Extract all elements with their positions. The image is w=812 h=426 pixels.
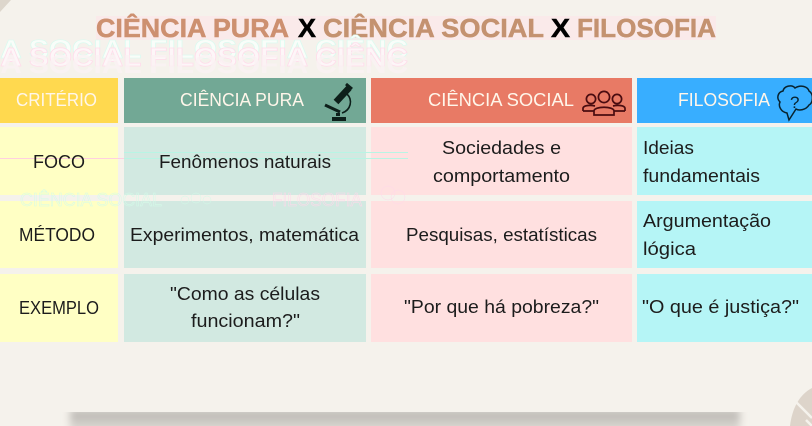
ghost header artifact: [20, 186, 405, 210]
header: ciência social: [371, 78, 632, 123]
row: foco: fundamentais: [643, 166, 760, 186]
title: X: [298, 13, 317, 43]
row: foco: [0, 127, 812, 195]
ghost title artifact: IA SOCIAL FILOSOFIA CIÊNC: [0, 49, 408, 79]
row: foco: Ideias: [643, 138, 694, 158]
ghost title artifact: IA SOCIAL FILOSOFIA CIÊNC: [0, 42, 408, 72]
header: ciência social: CIÊNCIA SOCIAL: [428, 90, 574, 110]
header: ciência pura: CIÊNCIA PURA: [180, 90, 304, 110]
title: [96, 13, 716, 43]
row: foco: FOCO: [33, 152, 85, 172]
row: exemplo: [0, 274, 812, 342]
row: método: Experimentos, matemática: [130, 225, 360, 245]
row: foco: Fenômenos naturais: [159, 152, 331, 172]
icon: group of people: [583, 91, 625, 115]
title: X: [551, 13, 571, 43]
header: ciência pura: [124, 78, 366, 123]
title: CIÊNCIA PURA: [96, 13, 289, 43]
title: CIÊNCIA SOCIAL: [323, 13, 544, 43]
ghost title artifact: [0, 34, 408, 79]
ghost header artifact: CIÊNCIA SOCIAL: [20, 190, 162, 210]
row: método: Pesquisas, estatísticas: [406, 225, 597, 245]
icon: microscope: [325, 84, 352, 119]
row: exemplo: "O que é justiça?": [642, 297, 799, 317]
header: critério: [0, 78, 118, 123]
header: critério: CRITÉRIO: [16, 90, 97, 110]
row: exemplo: funcionam?": [191, 311, 300, 331]
row: foco: Sociedades e: [442, 138, 561, 158]
bottom shadow: [40, 395, 780, 426]
row: exemplo: "Como as células: [170, 284, 320, 304]
ghost header artifact: FILOSOFIA: [272, 190, 362, 210]
row: exemplo: EXEMPLO: [19, 298, 99, 318]
title: FILOSOFIA: [577, 13, 716, 43]
row: método: lógica: [643, 239, 697, 259]
ghost title artifact: IA SOCIAL FILOSOFIA CIÊNC: [0, 34, 408, 64]
header: filosofia: [637, 78, 812, 123]
row: método: Argumentação: [643, 211, 771, 231]
icon: thought bubble with question mark: ?: [790, 93, 799, 112]
row: exemplo: "Por que há pobreza?": [404, 297, 599, 317]
header: filosofia: FILOSOFIA: [678, 90, 770, 110]
row: método: [0, 201, 812, 268]
row: método: MÉTODO: [19, 225, 95, 245]
icon: thought bubble with question mark: [778, 86, 812, 120]
corner decoration: top left: [0, 0, 11, 12]
row: foco: comportamento: [433, 166, 570, 186]
corner decoration: bottom right: [790, 388, 812, 426]
